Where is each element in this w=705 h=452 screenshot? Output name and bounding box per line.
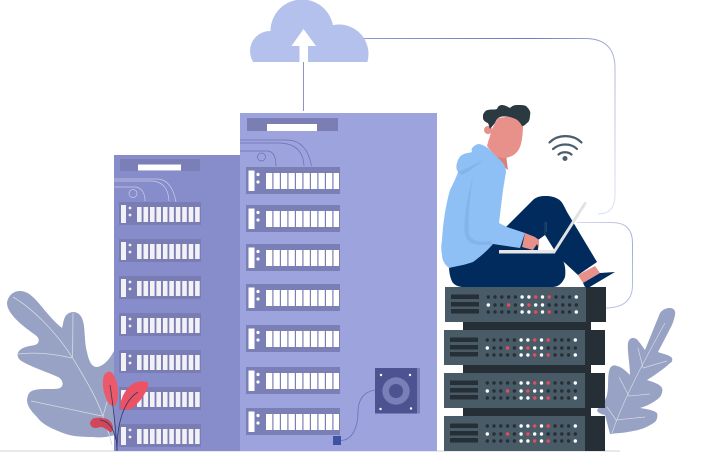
connector from server to cloud — [303, 62, 304, 111]
shoe — [583, 272, 615, 288]
hair — [483, 105, 530, 129]
person sitting with laptop — [441, 105, 615, 288]
hoodie shading — [458, 160, 493, 245]
connection line: cloud to person — [363, 38, 615, 214]
right decorative leaf — [597, 308, 675, 434]
server unit 1 — [445, 287, 606, 322]
server stack — [444, 287, 606, 451]
speaker cable — [341, 390, 375, 440]
server unit 2 — [444, 330, 605, 365]
upload arrow — [292, 29, 316, 62]
hand — [522, 233, 539, 250]
cloud with upload arrow — [250, 0, 368, 62]
server unit 3 — [444, 373, 605, 408]
speaker device — [375, 368, 420, 414]
connector block — [333, 436, 341, 445]
ground line — [0, 450, 620, 452]
hoodie — [441, 144, 525, 268]
neck — [488, 140, 508, 170]
small tower rack units — [119, 202, 201, 447]
small tower cables — [114, 179, 176, 202]
laptop — [499, 204, 585, 254]
gap between leg and laptop — [538, 235, 555, 251]
small server tower — [114, 155, 240, 451]
left decorative leaf — [7, 291, 115, 445]
large tower label plate — [247, 118, 338, 131]
large tower rack units — [246, 167, 340, 435]
connection line: laptop to server stack — [577, 222, 632, 308]
large tower cables — [240, 140, 312, 166]
server unit 4 — [444, 416, 605, 451]
small tower label plate — [120, 159, 200, 171]
foot — [578, 266, 600, 283]
red plant — [90, 372, 148, 451]
wifi icon — [550, 136, 582, 160]
stack connectors — [463, 322, 591, 416]
head — [484, 116, 523, 158]
legs and pants — [449, 196, 597, 287]
large server tower — [240, 113, 437, 451]
knee crease — [545, 222, 546, 235]
